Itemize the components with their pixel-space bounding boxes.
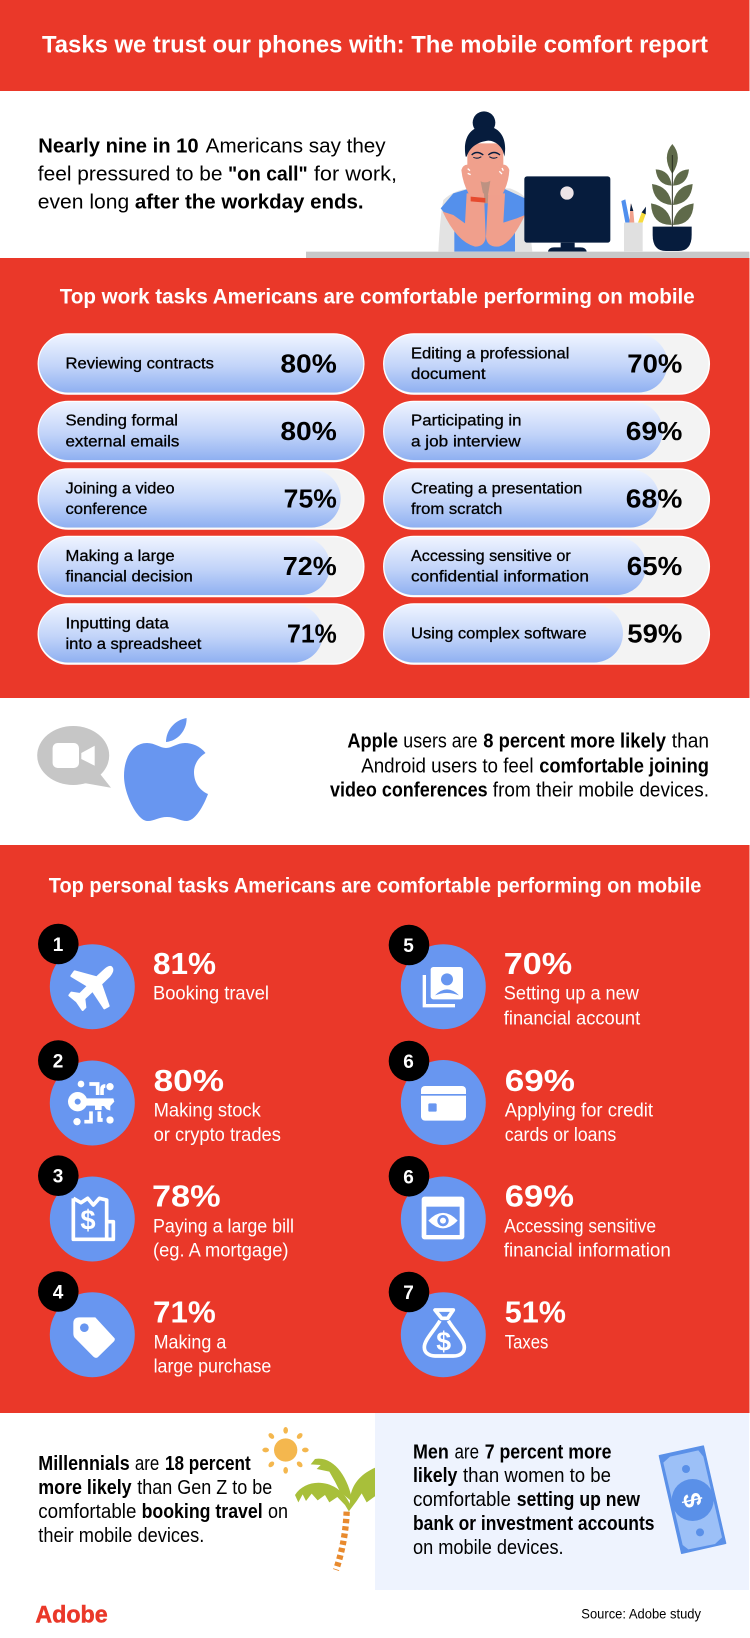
text block: on call statement: for work, [314,163,397,185]
item 6: credit cards or loans: Applying for credit [505,1101,654,1122]
icon: sun [262,1427,309,1474]
item 2: stock or crypto trades: 2 [53,1052,63,1072]
item 5: new financial account: financial account [504,1008,641,1029]
item 5: new financial account: Setting up a new [504,984,639,1005]
bar: joining a video conference 75%: 75% [284,484,337,514]
text block: on call statement [38,136,397,213]
bar: using complex software 59%: Using complex software [411,625,587,642]
bar: participating in a job interview 69%: 69% [626,416,682,446]
item 6: credit cards or loans: cards or loans [505,1125,616,1146]
bar: making a large financial decision 72%: 72% [283,551,337,581]
bar: accessing sensitive or confidential information 65% [384,536,709,596]
item 2: stock or crypto trades [38,1040,281,1146]
bar: joining a video conference 75% [38,469,364,529]
bar: participating in a job interview 69% [384,402,709,462]
title: Tasks we trust our phones with: The mobile comfort report [42,32,708,58]
item 6: sensitive financial information: 69% [505,1179,574,1214]
bar: reviewing contracts 80% [38,334,364,394]
bar: sending formal external emails 80%: Sending formal [66,413,178,430]
bar: using complex software 59% [384,604,709,664]
bar: editing a professional document 70%: document [411,366,486,383]
item 4: large purchase: 4 [53,1282,64,1304]
text block: millennials vs gen z: than Gen Z to be [137,1477,272,1499]
bar: reviewing contracts 80%: Reviewing contracts [66,356,214,373]
bar: sending formal external emails 80% [38,402,364,462]
icon: apple logo [124,718,208,821]
panel: men vs women callout [375,1413,749,1590]
item 6: sensitive financial information: financial information [504,1241,671,1262]
text block: millennials vs gen z: their mobile devices. [38,1525,204,1547]
item 1: booking travel: Booking travel [153,984,269,1005]
icon: banknote [659,1446,726,1553]
text block: men vs women: setting up new [517,1489,640,1511]
panel: header banner [0,0,750,91]
item 4: large purchase: 71% [153,1294,216,1329]
panel: top work tasks [0,258,750,698]
text block: on call statement: Nearly nine in 10 [38,136,199,158]
item 1: booking travel: 1 [53,935,64,956]
bar: using complex software 59%: 59% [627,618,682,648]
text block: millennials vs gen z: on [268,1501,288,1523]
bar: creating a presentation from scratch 68%: from scratch [411,501,502,518]
text block: men vs women: bank or investment accounts [413,1513,654,1535]
item 6: sensitive financial information [389,1156,671,1262]
bar: joining a video conference 75%: conference [66,501,147,518]
item 4: large purchase: Making a [154,1332,227,1353]
item 6: sensitive financial information: Accessing sensitive [504,1216,656,1237]
text block: apple vs android: users are [403,730,478,752]
illustration: stressed woman at desk [306,111,749,258]
bar: inputting data into a spreadsheet 71%: Inputting data [66,615,169,632]
item 3: paying a large bill: $ [80,1204,96,1235]
text block: men vs women: 7 percent more [485,1441,612,1463]
item 5: new financial account [389,925,641,1029]
item 3: paying a large bill: 78% [152,1179,221,1214]
item 2: stock or crypto trades: Making stock [154,1101,261,1122]
bar: sending formal external emails 80%: 80% [280,416,337,446]
item 6: credit cards or loans: 6 [403,1052,414,1073]
item 5: new financial account: 5 [403,936,414,957]
item 3: paying a large bill [38,1155,294,1262]
bar: editing a professional document 70%: Editing a professional [411,345,569,362]
bar: creating a presentation from scratch 68% [384,469,709,529]
text block: apple vs android: Android users to feel [361,755,534,777]
bar: accessing sensitive or confidential information 65%: 65% [627,551,682,581]
bar: editing a professional document 70%: 70% [627,349,682,379]
bar: creating a presentation from scratch 68%: Creating a presentation [411,480,582,497]
bar: making a large financial decision 72%: financial decision [66,569,193,586]
text block: on call statement: after the workday ends. [135,191,364,213]
item 1: booking travel [38,924,269,1029]
item 5: new financial account: 70% [504,946,572,981]
bar: making a large financial decision 72%: Making a large [66,548,175,565]
bar: making a large financial decision 72% [38,536,364,596]
bar: inputting data into a spreadsheet 71%: into a spreadsheet [66,636,202,653]
text block: apple vs android: 8 percent more likely [483,730,667,752]
bar: sending formal external emails 80%: external emails [66,434,179,451]
item 3: paying a large bill: (eg. A mortgage) [153,1241,288,1262]
text block: men vs women: are [454,1441,479,1463]
item 3: paying a large bill: 3 [53,1167,63,1188]
item 6: sensitive financial information: 6 [403,1167,414,1188]
icon: video call bubble [37,726,111,788]
text block: men vs women: comfortable [413,1489,511,1511]
text block: men vs women [413,1441,654,1559]
item 7: taxes: 7 [403,1283,414,1304]
item 7: taxes: 51% [505,1294,566,1329]
text block: apple vs android: comfortable joining [539,755,709,777]
text block: apple vs android [330,730,709,802]
source note: Source: Adobe study [581,1605,701,1621]
text block: millennials vs gen z: booking travel [142,1501,263,1523]
bar: creating a presentation from scratch 68%: 68% [626,484,682,514]
item 6: credit cards or loans [389,1041,654,1146]
text block: men vs women: Men [413,1441,449,1463]
item 7: taxes: $ [436,1327,451,1357]
text block: millennials vs gen z [38,1453,288,1547]
bar: inputting data into a spreadsheet 71%: 71% [287,618,337,648]
bar: editing a professional document 70% [384,334,709,394]
text block: millennials vs gen z: more likely [38,1477,132,1499]
item 3: paying a large bill: Paying a large bill [153,1216,294,1237]
bar: joining a video conference 75%: Joining a video [66,480,175,497]
bar: accessing sensitive or confidential information 65%: Accessing sensitive or [411,548,571,565]
text block: apple vs android: Apple [347,730,398,752]
text block: on call statement: Americans say they [206,136,386,158]
icon: banknote: $ [676,1490,707,1510]
text block: apple vs android: from their mobile devices. [493,780,709,802]
bar: participating in a job interview 69%: Participating in [411,413,522,430]
bar: accessing sensitive or confidential information 65%: confidential information [411,569,589,586]
heading: personal tasks: Top personal tasks Americans are comfortable performing on mobile [49,875,701,898]
text block: millennials vs gen z: 18 percent [165,1453,251,1475]
item 7: taxes: Taxes [505,1332,548,1353]
text block: men vs women: on mobile devices. [413,1537,564,1559]
item 1: booking travel: 81% [153,946,216,981]
heading: work tasks: Top work tasks Americans are comfortable performing on mobile [60,286,695,308]
text block: apple vs android: video conferences [330,780,488,802]
text block: millennials vs gen z: comfortable [38,1501,136,1523]
bar: participating in a job interview 69%: a job interview [411,434,521,451]
text block: on call statement: "on call" [228,163,308,185]
text block: men vs women: likely [413,1465,458,1487]
item 4: large purchase [38,1271,271,1378]
logo: Adobe: Adobe [35,1601,108,1628]
text block: on call statement: even long [38,191,129,213]
text block: men vs women: than women to be [463,1465,611,1487]
text block: millennials vs gen z: are [135,1453,159,1475]
bar: inputting data into a spreadsheet 71% [38,604,364,664]
item 2: stock or crypto trades: 80% [154,1063,224,1098]
item 6: credit cards or loans: 69% [505,1063,575,1098]
text block: millennials vs gen z: Millennials [38,1453,130,1475]
item 7: taxes [389,1272,566,1377]
text block: apple vs android: than [672,730,709,752]
panel: top personal tasks [0,845,750,1413]
item 2: stock or crypto trades: or crypto trades [154,1125,281,1146]
icon: palm tree [295,1459,377,1570]
bar: reviewing contracts 80%: 80% [280,349,337,379]
text block: on call statement: feel pressured to be [38,163,222,185]
item 4: large purchase: large purchase [154,1357,271,1378]
